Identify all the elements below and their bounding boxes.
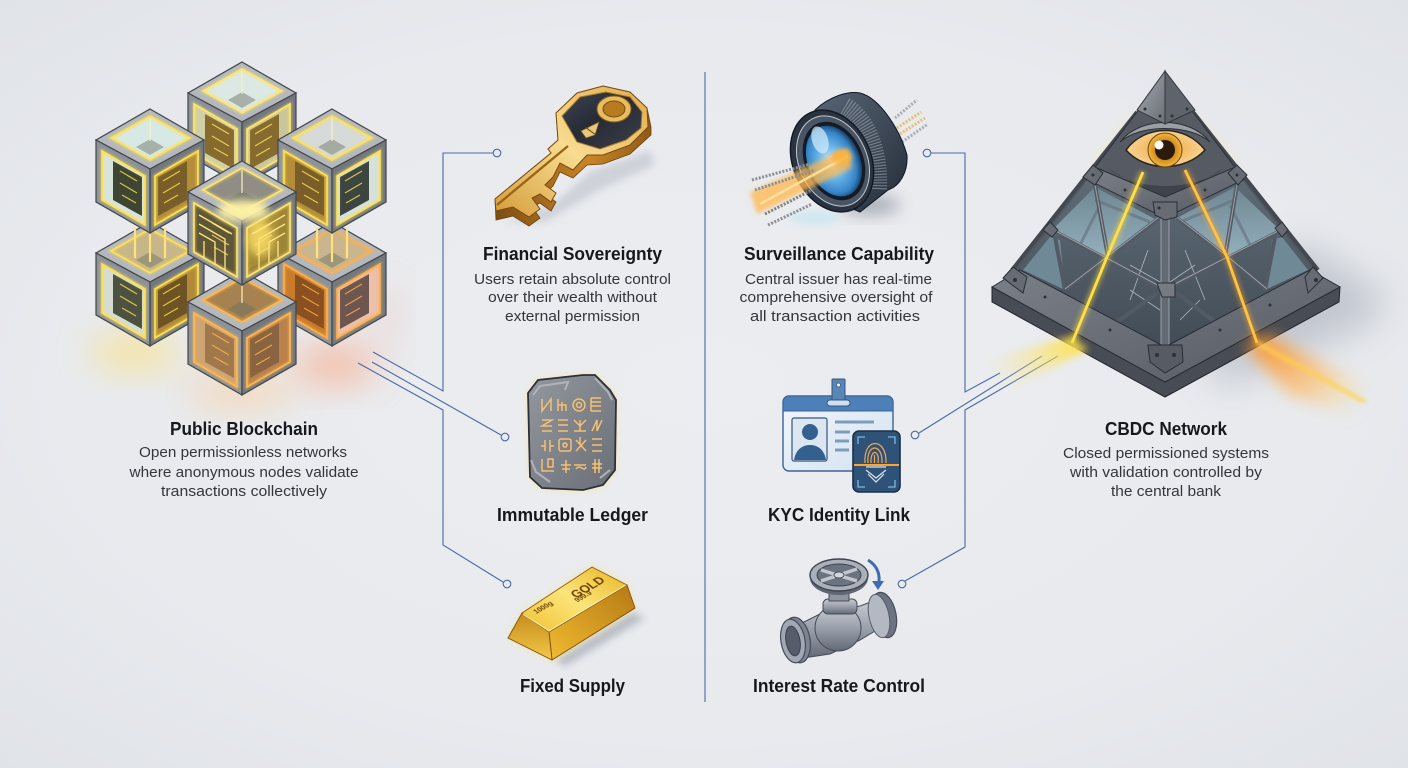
heading: kyc identity link: KYC Identity Link	[768, 505, 911, 525]
icon: pyramid steel cap	[1137, 71, 1195, 124]
panel: cbdc network	[980, 71, 1385, 500]
heading: financial sovereignty: Financial Sovereignty	[483, 244, 662, 264]
icon: id card with fingerprint	[783, 379, 900, 492]
text block: surveillance description: comprehensive oversight of	[740, 289, 933, 306]
text block: financial sovereignty description: over their wealth without	[488, 289, 658, 306]
text: gold bar stamp	[531, 574, 608, 615]
icon: pyramid shadow	[1095, 115, 1385, 385]
icon: floor glow under cube cluster	[90, 285, 399, 406]
text block: cbdc description: Closed permissioned systems	[1063, 445, 1269, 462]
icon: pyramid glass faces	[1012, 112, 1318, 347]
panel: kyc identity link	[768, 379, 911, 525]
text block: public blockchain description	[128, 444, 358, 500]
icon: eye chamber	[1093, 108, 1237, 205]
panel: public blockchain	[90, 62, 399, 500]
icon: rear data streak	[895, 100, 928, 142]
icon: vertical data links	[135, 228, 347, 320]
text block: surveillance description: Central issuer has real-time	[745, 271, 932, 288]
icon: fingerprint	[865, 444, 886, 482]
text block: cbdc description	[1063, 445, 1269, 500]
text block: public blockchain description: where anonymous nodes validate	[128, 464, 358, 481]
icon: camera lens	[750, 93, 928, 225]
panel: financial sovereignty	[474, 86, 671, 325]
icon: left light beam	[980, 172, 1143, 392]
icon: central cube glow and circuits	[199, 200, 285, 270]
text block: surveillance description: all transaction activities	[750, 308, 920, 325]
icon: golden key	[495, 86, 655, 226]
icon: all-seeing pyramid	[980, 71, 1385, 420]
text block: financial sovereignty description: external permission	[505, 308, 640, 325]
heading: surveillance capability: Surveillance Capability	[744, 244, 934, 264]
panel: surveillance capability	[740, 93, 934, 325]
text block: public blockchain description: transactions collectively	[161, 483, 328, 500]
icon: stone tablet	[528, 375, 616, 490]
icon: data beam through lens	[750, 148, 852, 225]
heading: public blockchain: Public Blockchain	[170, 419, 318, 439]
icon: gold bar	[508, 567, 645, 666]
text: gold bar stamp: 999.9	[572, 589, 594, 604]
panel: immutable ledger	[497, 375, 648, 525]
icon: rotation arrow	[868, 560, 884, 590]
heading: immutable ledger: Immutable Ledger	[497, 505, 648, 525]
text: gold bar stamp: GOLD	[567, 574, 608, 601]
icon: right light beam	[1185, 170, 1385, 420]
connectors: left	[358, 149, 511, 588]
icon: pyramid outer edges	[1012, 112, 1318, 270]
heading: interest rate control: Interest Rate Control	[753, 676, 925, 696]
text block: surveillance description	[740, 271, 933, 325]
heading: cbdc network: CBDC Network	[1105, 419, 1228, 439]
panel: fixed supply	[508, 567, 645, 696]
text block: financial sovereignty description	[474, 271, 671, 325]
icon: blockchain cube cluster	[96, 62, 386, 395]
text block: financial sovereignty description: Users retain absolute control	[474, 271, 671, 288]
icon: pyramid struts	[1052, 185, 1282, 347]
text: gold bar stamp: 1000g	[531, 599, 555, 615]
connectors: right	[898, 149, 1058, 588]
text block: cbdc description: the central bank	[1111, 483, 1222, 500]
heading: fixed supply: Fixed Supply	[520, 676, 625, 696]
center divider	[704, 72, 706, 702]
icon: iron base plate	[992, 267, 1340, 397]
text block: cbdc description: with validation controlled by	[1069, 464, 1263, 481]
panel: interest rate control	[753, 559, 925, 696]
icon: valve hand wheel	[810, 559, 868, 595]
icon: valve	[777, 559, 901, 665]
icon: tablet glyph rows	[541, 398, 602, 473]
icon: upper iron band	[1043, 165, 1288, 297]
text block: public blockchain description: Open permissionless networks	[139, 444, 347, 461]
